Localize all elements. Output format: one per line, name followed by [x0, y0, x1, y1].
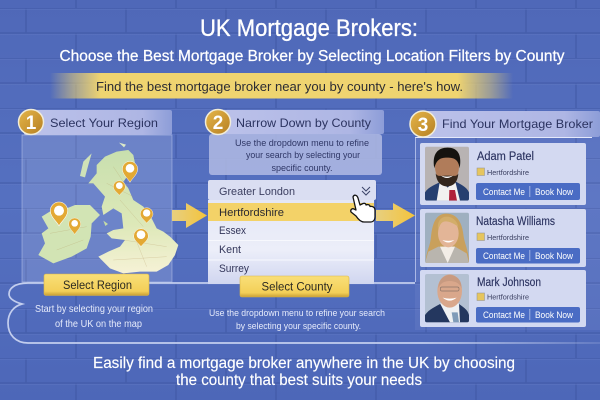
yellow intro banner [50, 73, 513, 98]
arrow: step 2 to 3 [376, 203, 415, 228]
region instructions [35, 304, 153, 330]
description box: your search by selecting your [246, 150, 360, 160]
broker card: Mark Johnson [420, 270, 586, 327]
yellow intro banner: Find the best mortgage broker near you by county - here's how. [96, 79, 463, 94]
location: Hertfordshire [487, 170, 529, 177]
map pins [50, 161, 153, 247]
subtitle: Choose the Best Mortgage Broker by Selecting Location Filters by County [60, 48, 565, 65]
name: Adam Patel [477, 151, 534, 163]
header bar [420, 111, 600, 137]
closing statement: the county that best suits your needs [176, 372, 422, 389]
step number 3 [410, 111, 436, 137]
location [477, 168, 529, 177]
description box: Use the dropdown menu to refine [235, 138, 369, 148]
map of UK and Ireland [38, 143, 178, 273]
header bar [212, 110, 384, 134]
step number 3: 3 [418, 115, 428, 136]
name: Natasha Williams [476, 216, 555, 228]
county list: Kent [219, 244, 241, 256]
contact buttons: Contact Me [483, 310, 525, 320]
header bar [24, 110, 172, 135]
broker card: Natasha Williams [420, 209, 586, 267]
step number 2 [206, 110, 230, 134]
county instructions: by selecting your specific county. [236, 321, 361, 332]
county list: Surrey [219, 263, 249, 275]
contact buttons: Book Now [535, 251, 573, 261]
name: Mark Johnson [477, 277, 541, 289]
step number 2: 2 [213, 113, 223, 134]
location: Hertfordshire [487, 294, 529, 302]
contact buttons: Book Now [535, 187, 573, 197]
portrait: Adam Patel [425, 147, 469, 201]
instruction outline bracket [8, 283, 600, 343]
step number 1 [18, 110, 44, 134]
panel: select your region [18, 110, 178, 330]
portrait: Mark Johnson [425, 274, 469, 322]
contact buttons: Book Now [535, 310, 573, 320]
contact buttons: Contact Me [483, 251, 525, 261]
county list: Hertfordshire [219, 207, 284, 219]
select region button: Select Region [63, 280, 132, 292]
closing statement [93, 355, 515, 389]
panel body [22, 135, 172, 282]
heading: Narrow Down by County [236, 116, 371, 130]
broker card: Adam Patel [420, 143, 586, 205]
contact buttons [476, 183, 580, 200]
contact buttons [476, 307, 580, 322]
arrow: step 1 to 2 [172, 203, 207, 228]
contact buttons [476, 248, 580, 264]
closing statement: Easily find a mortgage broker anywhere in the UK by choosing [93, 355, 515, 372]
select county button [240, 276, 349, 297]
title: UK Mortgage Brokers: [200, 15, 418, 42]
region instructions: Start by selecting your region [35, 304, 153, 315]
dropdown select [208, 180, 376, 200]
county instructions: Use the dropdown menu to refine your search [209, 308, 385, 319]
region instructions: of the UK on the map [55, 319, 142, 330]
select region button [44, 274, 149, 296]
heading: Find Your Mortgage Broker [442, 117, 593, 131]
step number 1: 1 [26, 113, 37, 134]
panel body [415, 137, 600, 330]
location: Hertfordshire [487, 235, 529, 242]
description box: specific county. [272, 163, 332, 173]
description box [209, 134, 382, 175]
hand cursor [351, 195, 375, 222]
panel: find your mortgage broker [410, 111, 600, 330]
county instructions [209, 308, 385, 332]
select county button: Select County [262, 282, 333, 294]
portrait: Natasha Williams [425, 213, 469, 263]
heading: Select Your Region [50, 116, 158, 130]
contact buttons: Contact Me [483, 187, 525, 197]
panel: narrow down by county [206, 110, 385, 332]
dropdown select: Greater London [219, 186, 295, 198]
location [477, 233, 529, 242]
location [477, 293, 529, 302]
county list: Essex [219, 225, 246, 237]
county list [208, 200, 374, 284]
